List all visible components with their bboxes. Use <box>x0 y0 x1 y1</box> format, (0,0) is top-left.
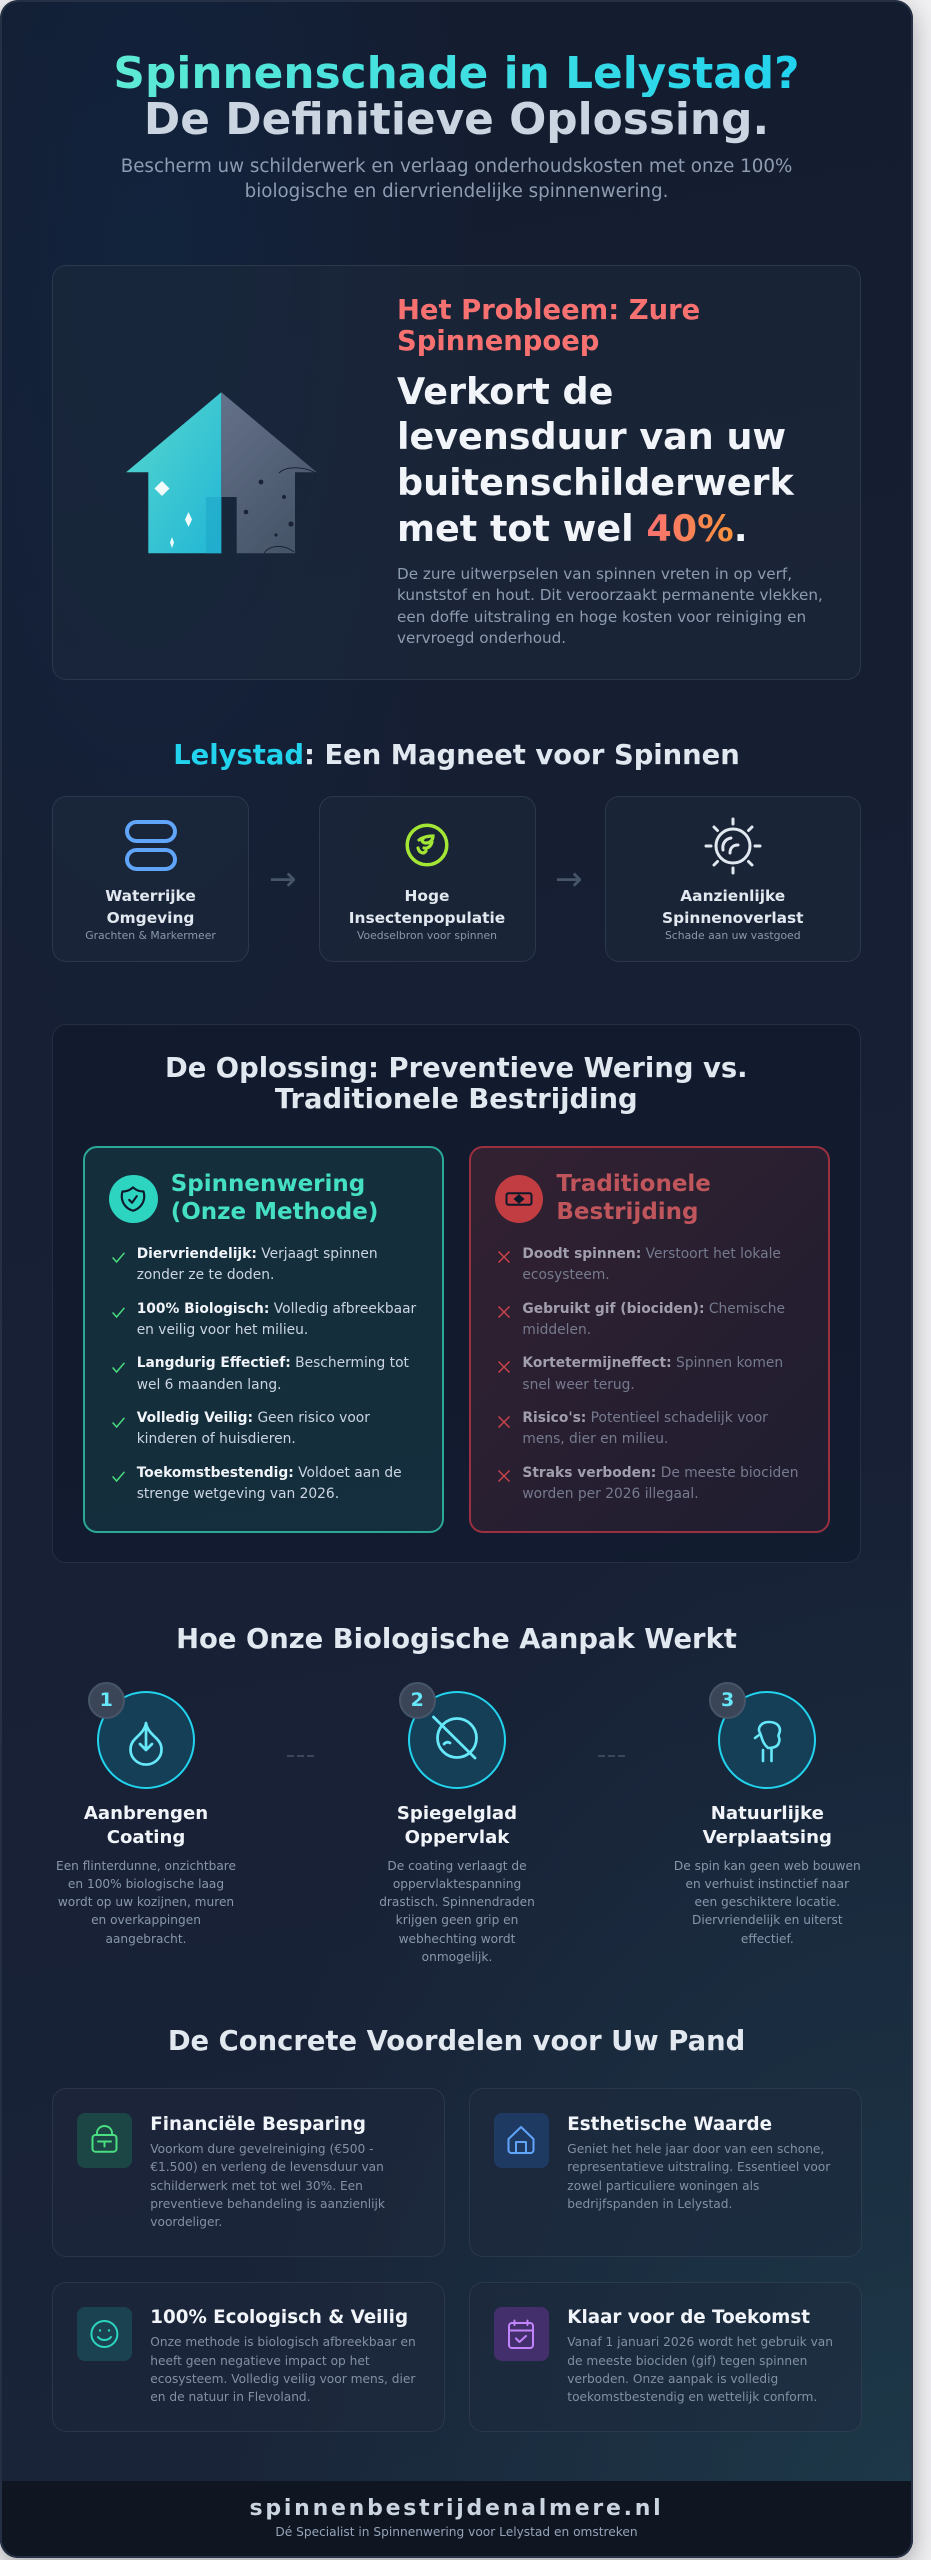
problem label: Spinnenpoep <box>397 326 599 356</box>
card text: de meeste biociden (gif) tegen spinnen <box>567 2354 807 2368</box>
problem label <box>397 294 700 356</box>
step description: en 100% biologische laag <box>68 1877 224 1891</box>
step description <box>657 1857 877 1948</box>
item <box>112 1246 378 1283</box>
step description <box>379 1859 535 1964</box>
card: insecten <box>318 796 536 962</box>
panel: problem <box>52 265 861 680</box>
step description: Een flinterdunne, onzichtbare <box>56 1859 236 1873</box>
item: wel 6 maanden lang. <box>137 1377 282 1393</box>
item: worden per 2026 illegaal. <box>522 1486 699 1502</box>
card text: en de natuur in Flevoland. <box>150 2390 311 2404</box>
item <box>498 1246 781 1283</box>
headline: levensduur van uw <box>397 415 786 458</box>
icon: insect circle <box>405 824 449 866</box>
card text: Vanaf 1 januari 2026 wordt het gebruik van <box>567 2335 833 2349</box>
step description: wordt op uw kozijnen, muren <box>58 1895 234 1909</box>
list: benefits <box>112 1246 416 1502</box>
card text <box>150 2140 385 2231</box>
card text: heeft geen negatieve impact op het <box>150 2354 370 2368</box>
card text: preventieve behandeling is aanzienlijk <box>150 2197 385 2211</box>
item <box>498 1465 799 1502</box>
icon: house <box>494 2113 549 2168</box>
item: mens, dier en milieu. <box>522 1431 668 1447</box>
icon: no web <box>408 1691 506 1789</box>
icon: half clean half damaged house <box>126 392 316 554</box>
section: Lelystad magnet <box>52 740 861 962</box>
step 2 <box>379 1682 535 1964</box>
card title: Waterrijke <box>105 887 196 905</box>
problem body text <box>397 565 823 647</box>
step description: krijgen geen grip en <box>396 1913 518 1927</box>
item: en veilig voor het milieu. <box>137 1322 308 1338</box>
problem label: Het Probleem: Zure <box>397 294 700 326</box>
item: Doodt spinnen: Verstoort het lokale <box>522 1246 781 1262</box>
card text: toekomstbestendig en wettelijk conform. <box>567 2390 817 2404</box>
panel: solution comparison <box>52 1024 860 1563</box>
item: Volledig Veilig: Geen risico voor <box>137 1410 370 1426</box>
card text: zowel particuliere woningen als <box>567 2179 759 2193</box>
item: Risico's: Potentieel schadelijk voor <box>522 1410 768 1426</box>
step title: Aanbrengen <box>84 1803 208 1824</box>
card title: Insectenpopulatie <box>349 909 505 927</box>
step description: drastisch. Spinnendraden <box>379 1895 535 1909</box>
card title: Omgeving <box>107 909 194 927</box>
item: 100% Biologisch: Volledig afbreekbaar <box>137 1301 416 1317</box>
card title: Financiële Besparing <box>150 2114 366 2135</box>
icon: spider web sun <box>704 818 762 874</box>
card subtitle: Voedselbron voor spinnen <box>357 929 497 942</box>
card text: ecosysteem. Volledig veilig voor mens, dier <box>150 2372 415 2386</box>
item: ecosysteem. <box>522 1267 610 1283</box>
step 1 <box>56 1682 236 1946</box>
step 3 <box>674 1682 861 1946</box>
item <box>112 1410 370 1447</box>
footer <box>0 2481 913 2558</box>
icon: smile <box>77 2307 132 2361</box>
card text: representatieve uitstraling. Essentieel voor <box>567 2160 830 2174</box>
subtitle: Bescherm uw schilderwerk en verlaag onderhoudskosten met onze 100% <box>121 156 792 177</box>
card text: Geniet het hele jaar door van een schone, <box>567 2142 824 2156</box>
card title: Klaar voor de Toekomst <box>567 2307 810 2328</box>
panel: spinnenwering <box>83 1146 444 1533</box>
box heading: Traditionele <box>556 1171 711 1197</box>
card text: Onze methode is biologisch afbreekbaar en <box>150 2335 416 2349</box>
step title: Oppervlak <box>405 1827 509 1848</box>
item <box>498 1410 768 1447</box>
card title: Spinnenoverlast <box>662 909 804 927</box>
step description: oppervlaktespanning <box>393 1877 521 1891</box>
card subtitle: Grachten & Markermeer <box>85 929 216 942</box>
card text: verboden. Onze aanpak is volledig <box>567 2372 778 2386</box>
card: spinnenoverlast <box>604 796 861 962</box>
problem body text: vervroegd onderhoud. <box>397 629 566 647</box>
item <box>112 1465 402 1502</box>
headline: met tot wel 40%. <box>397 507 748 550</box>
number badge: 2 <box>411 1689 424 1711</box>
number badge <box>399 1682 436 1719</box>
footer tagline: Dé Specialist in Spinnenwering voor Lelystad en omstreken <box>275 2525 638 2539</box>
card text <box>567 2333 833 2407</box>
icon: water <box>125 820 177 871</box>
subtitle: biologische en diervriendelijke spinnenwering. <box>245 181 668 202</box>
card title <box>105 887 196 927</box>
card: waterrijke omgeving <box>52 796 249 962</box>
section: benefits <box>0 2020 913 2435</box>
headline: Verkort de <box>397 370 613 412</box>
card title: Aanzienlijke <box>680 887 785 905</box>
step title: Spiegelglad <box>397 1803 517 1824</box>
title: De Definitieve Oplossing. <box>144 94 769 145</box>
item: zonder ze te doden. <box>137 1267 274 1283</box>
heading <box>165 1053 748 1115</box>
arrow: → <box>555 859 583 898</box>
section: how it works <box>56 1624 861 1964</box>
card text: €1.500) en verleng de levensduur van <box>150 2160 384 2174</box>
list: drawbacks <box>498 1246 799 1502</box>
card: financiele besparing <box>52 2088 445 2257</box>
arrow: → <box>269 859 297 898</box>
box heading <box>556 1171 711 1225</box>
item <box>498 1301 785 1338</box>
headline <box>397 370 794 550</box>
title: Spinnenschade in Lelystad? <box>113 48 800 99</box>
header <box>113 48 800 202</box>
item: Diervriendelijk: Verjaagt spinnen <box>137 1246 378 1262</box>
item: Kortetermijneffect: Spinnen komen <box>522 1355 783 1371</box>
item: Langdurig Effectief: Bescherming tot <box>137 1355 409 1371</box>
icon: money <box>495 1175 543 1223</box>
headline: buitenschilderwerk <box>397 461 794 504</box>
subtitle <box>121 156 792 202</box>
step title: Coating <box>107 1827 185 1848</box>
card text: bedrijfspanden in Lelystad. <box>567 2197 732 2211</box>
item: kinderen of huisdieren. <box>137 1431 296 1447</box>
footer brand: spinnenbestrijdenalmere.nl <box>250 2496 663 2521</box>
step description: De spin kan geen web bouwen <box>674 1859 861 1873</box>
item <box>112 1301 416 1338</box>
card title <box>662 887 804 927</box>
card title: Esthetische Waarde <box>567 2114 772 2135</box>
number badge <box>709 1682 746 1719</box>
step description <box>56 1859 236 1946</box>
number badge: 3 <box>721 1689 734 1711</box>
step title <box>397 1803 517 1848</box>
connector dashes <box>287 1755 314 1757</box>
heading: Traditionele Bestrijding <box>275 1084 638 1115</box>
card: toekomst <box>469 2282 862 2432</box>
card: esthetische waarde <box>469 2088 862 2257</box>
heading: Lelystad: Een Magneet voor Spinnen <box>173 740 740 771</box>
problem body text: een doffe uitstraling en hoge kosten voor reiniging en <box>397 608 806 626</box>
step description: Diervriendelijk en uiterst <box>692 1913 843 1927</box>
step description: De coating verlaagt de <box>387 1859 527 1873</box>
step description: een geschiktere locatie. <box>694 1895 840 1909</box>
connector dashes <box>598 1755 625 1757</box>
item: Toekomstbestendig: Voldoet aan de <box>137 1465 402 1481</box>
step description: effectief. <box>741 1932 794 1946</box>
card title <box>349 887 505 927</box>
item <box>112 1355 409 1393</box>
item: Gebruikt gif (biociden): Chemische <box>522 1301 785 1317</box>
item: strenge wetgeving van 2026. <box>137 1486 339 1502</box>
item <box>498 1355 783 1393</box>
card title: 100% Ecologisch & Veilig <box>150 2307 408 2328</box>
box heading: Bestrijding <box>556 1199 699 1225</box>
step description: en overkappingen <box>91 1913 201 1927</box>
step title <box>667 1802 867 1851</box>
step description: onmogelijk. <box>422 1950 492 1964</box>
card subtitle: Schade aan uw vastgoed <box>665 929 801 942</box>
heading: Hoe Onze Biologische Aanpak Werkt <box>176 1624 737 1655</box>
step title: Natuurlijke <box>711 1803 824 1824</box>
heading: De Concrete Voordelen voor Uw Pand <box>168 2026 745 2057</box>
step description: en verhuist instinctief naar <box>686 1877 849 1891</box>
icon: lock <box>77 2113 132 2168</box>
icon: calendar <box>494 2307 549 2361</box>
step description: webhechting wordt <box>399 1932 515 1946</box>
card: ecologisch <box>52 2282 445 2432</box>
panel: traditionele bestrijding <box>469 1146 830 1533</box>
box heading: Spinnenwering <box>171 1171 365 1197</box>
card text: schilderwerk met tot wel 30%. Een <box>150 2179 363 2193</box>
icon: shield <box>109 1175 158 1223</box>
box heading <box>171 1171 378 1225</box>
card title: Hoge <box>405 887 449 905</box>
icon: relocating spider <box>718 1691 816 1789</box>
card text <box>150 2333 416 2407</box>
step title: Verplaatsing <box>703 1827 832 1848</box>
heading: De Oplossing: Preventieve Wering vs. <box>165 1053 748 1084</box>
card text: voordeliger. <box>150 2215 222 2229</box>
card text: Voorkom dure gevelreiniging (€500 - <box>150 2142 374 2156</box>
title <box>113 48 800 145</box>
item: snel weer terug. <box>522 1377 635 1393</box>
item: middelen. <box>522 1322 591 1338</box>
number badge <box>88 1682 125 1719</box>
step title <box>84 1803 208 1848</box>
card text <box>567 2140 830 2213</box>
step description: aangebracht. <box>106 1932 186 1946</box>
icon: droplet <box>97 1691 195 1789</box>
problem body text: kunststof en hout. Dit veroorzaakt permanente vlekken, <box>397 586 823 604</box>
box heading: (Onze Methode) <box>171 1199 378 1225</box>
number badge: 1 <box>100 1689 113 1711</box>
item: Straks verboden: De meeste biociden <box>522 1465 799 1481</box>
problem body text: De zure uitwerpselen van spinnen vreten in op verf, <box>397 565 792 583</box>
